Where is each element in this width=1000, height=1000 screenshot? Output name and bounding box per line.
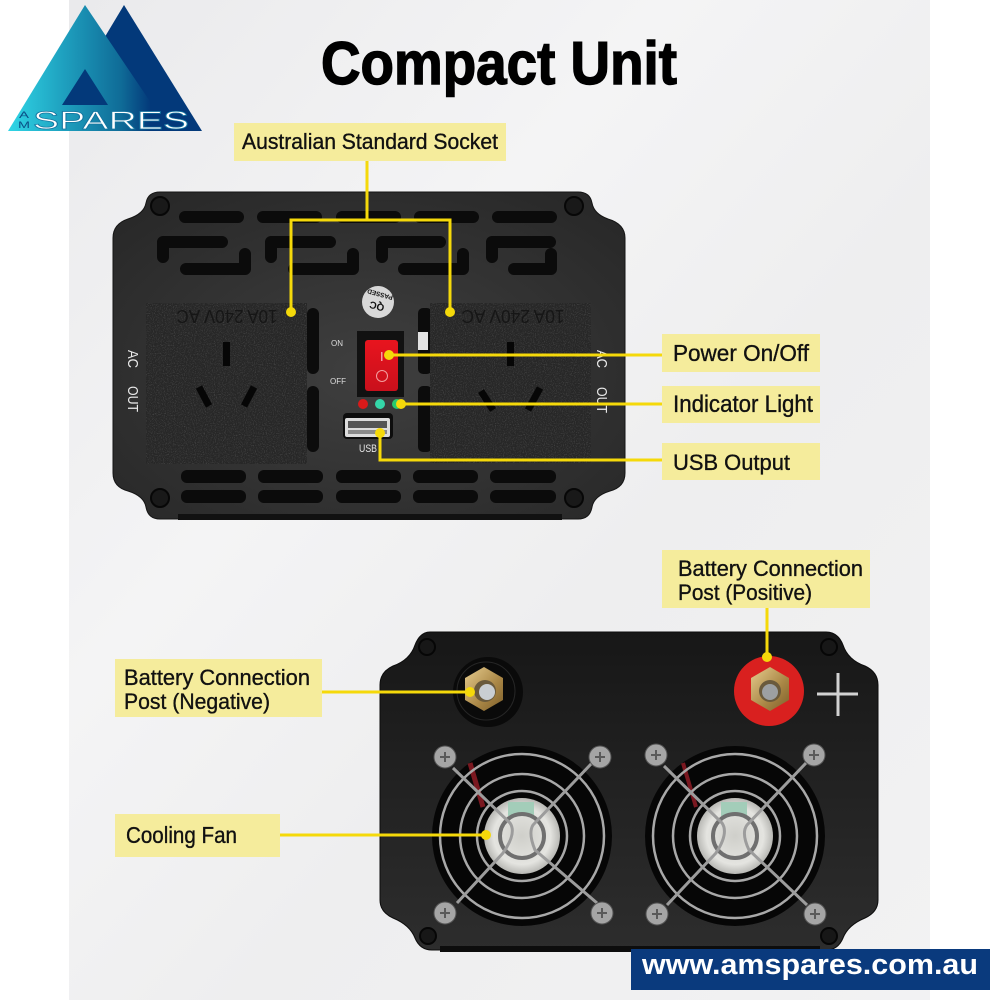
indicator lights — [358, 399, 402, 409]
ON OFF text: OFF — [330, 377, 346, 386]
label: Australian Standard Socket — [234, 123, 506, 161]
AC OUT labels: OUT — [124, 386, 141, 412]
positive post — [734, 656, 804, 726]
right cooling fan — [645, 744, 826, 926]
inverter rear panel — [380, 632, 878, 952]
label: Battery Connection Post (Negative): Post (Negative) — [124, 689, 270, 714]
AC OUT labels: AC — [124, 350, 141, 368]
left cooling fan — [432, 746, 613, 926]
USB port: USB — [359, 443, 377, 455]
label: Australian Standard Socket: Australian Standard Socket — [242, 129, 498, 154]
label: Power On/Off: Power On/Off — [673, 340, 810, 366]
label: Indicator Light: Indicator Light — [673, 391, 813, 418]
logo: AM Spares: SPARES — [33, 107, 189, 135]
label: Battery Connection Post (Positive): Battery Connection — [678, 556, 863, 581]
AC OUT labels: AC — [593, 350, 610, 368]
AC OUT labels: OUT — [593, 387, 610, 413]
label: Indicator Light — [662, 386, 820, 423]
AC OUT labels — [124, 350, 610, 413]
USB port — [343, 413, 393, 455]
negative post — [453, 657, 523, 727]
plus symbol — [817, 673, 858, 716]
left socket: 10A 240V AC — [176, 306, 278, 326]
label: USB Output — [662, 443, 820, 480]
label: USB Output: USB Output — [673, 450, 791, 475]
QC passed sticker: PASSED — [366, 287, 394, 301]
logo: AM Spares: A — [19, 110, 29, 120]
label: Battery Connection Post (Negative) — [115, 659, 322, 717]
top vent slots — [179, 211, 557, 223]
inverter front panel — [113, 192, 625, 520]
right socket: 10A 240V AC — [462, 306, 564, 326]
label: Battery Connection Post (Negative): Battery Connection — [124, 665, 310, 690]
left socket — [146, 303, 307, 464]
right socket — [430, 303, 591, 463]
label: Battery Connection Post (Positive) — [662, 550, 870, 608]
side slots — [307, 308, 432, 452]
panel screws — [151, 197, 583, 507]
label: Battery Connection Post (Positive): Post (Positive) — [678, 580, 812, 605]
panel body — [113, 192, 625, 519]
QC passed sticker — [362, 286, 394, 318]
logo: AM Spares: M — [18, 120, 30, 130]
QC passed sticker: QC — [368, 298, 386, 313]
ON OFF text: ON — [331, 339, 343, 348]
panel body — [380, 632, 878, 950]
panel screws — [419, 639, 837, 944]
label: Power On/Off — [662, 334, 820, 372]
power switch — [357, 331, 404, 397]
logo: AM Spares — [8, 5, 202, 135]
label: Cooling Fan: Cooling Fan — [126, 822, 237, 848]
website banner — [631, 949, 990, 990]
leader lines and dots — [280, 160, 772, 840]
shaped vent slots — [163, 242, 551, 269]
bottom vent slots — [181, 470, 556, 503]
title: Compact Unit — [321, 30, 677, 97]
website banner: www.amspares.com.au — [641, 949, 978, 981]
label: Cooling Fan — [115, 814, 280, 857]
ON OFF text — [330, 339, 346, 386]
